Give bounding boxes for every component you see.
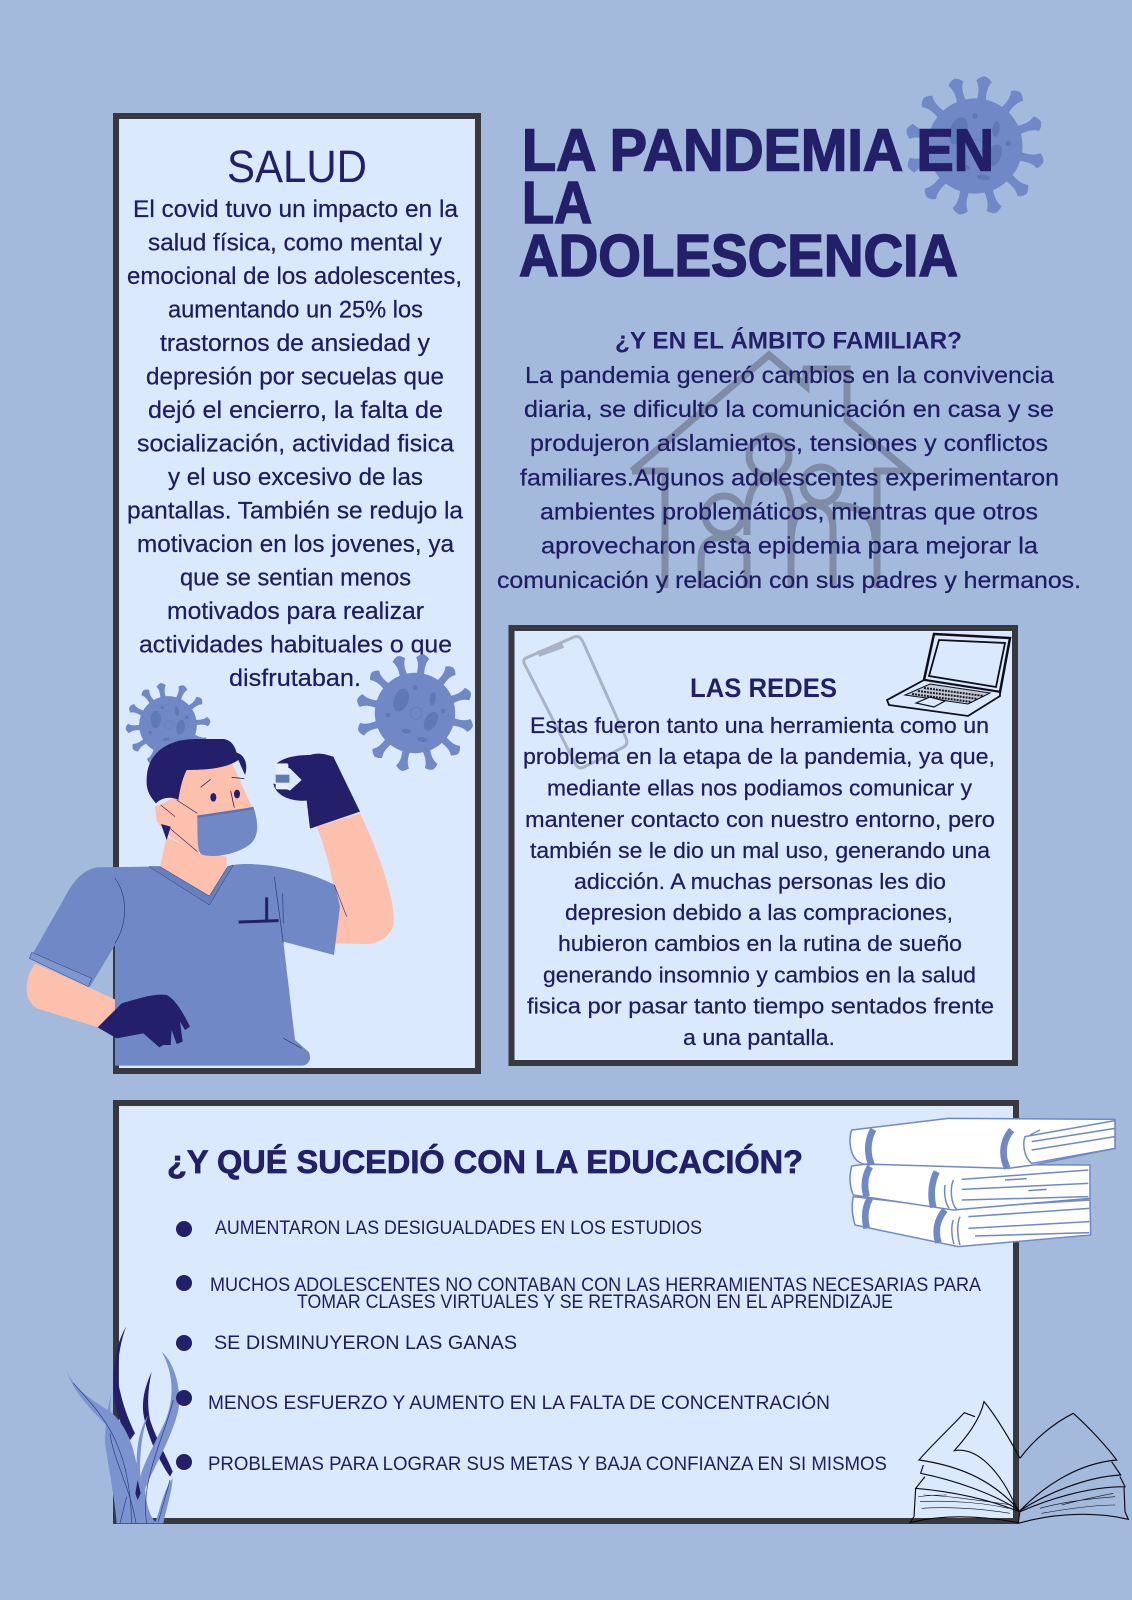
icon: virus large in salud panel [348, 646, 482, 780]
icon: laptop [887, 634, 1010, 716]
mask [197, 807, 257, 856]
icon: virus small in salud panel [118, 676, 218, 775]
text block: las redes: a una pantalla. [683, 1025, 835, 1050]
text block: las redes: mantener contacto con nuestro entorno, pero [525, 807, 995, 832]
icon: open book [910, 1402, 1128, 1523]
text block: las redes: hubieron cambios en la rutina de sueño [558, 931, 962, 956]
text block: salud: salud física, como mental y [148, 230, 442, 256]
text block: las redes: generando insomnio y cambios en la salud [543, 962, 976, 988]
text block: ámbito familiar: aprovecharon esta epidemia para mejorar la [541, 532, 1039, 558]
text block: las redes: adicción. A muchas personas les dio [574, 869, 946, 894]
icon: seaweed plant [67, 1327, 179, 1523]
text block: salud: aumentando un 25% los [168, 296, 423, 324]
text block: salud: trastornos de ansiedad y [160, 330, 430, 357]
top book [850, 1118, 1115, 1168]
text block: salud: El covid tuvo un impacto en la [133, 196, 459, 223]
pocket [239, 897, 279, 922]
title [519, 118, 994, 289]
text block: salud: emocional de los adolescentes, [127, 263, 462, 290]
text block: salud: que se sentian menos [180, 564, 411, 592]
cuff [29, 952, 92, 987]
heading: educación: ¿Y QUÉ SUCEDIÓ CON LA EDUCACIÓN? [167, 1144, 803, 1180]
heading: ámbito familiar: ¿Y EN EL ÁMBITO FAMILIAR? [615, 326, 962, 354]
head [155, 758, 253, 853]
heading: las redes: LAS REDES [690, 673, 837, 703]
text block: ámbito familiar: produjeron aislamientos, tensiones y conflictos [530, 430, 1048, 456]
text block: salud: socialización, actividad fisica [137, 430, 455, 458]
bullet list: educación: MUCHOS ADOLESCENTES NO CONTABAN CON LAS HERRAMIENTAS NECESARIAS PARA [210, 1275, 981, 1296]
heading: salud: SALUD [227, 141, 367, 192]
panel: salud [116, 116, 478, 1071]
panel: educación [116, 1103, 1016, 1521]
text block: las redes: depresion debido a las compraciones, [565, 900, 953, 925]
text block: salud: pantallas. También se redujo la [127, 498, 464, 524]
bottom book [852, 1197, 1091, 1247]
text block: las redes: mediante ellas nos podiamos comunicar y [547, 776, 973, 800]
lower arm [27, 963, 123, 1027]
bullet list: educación: MENOS ESFUERZO Y AUMENTO EN LA FALTA DE CONCENTRACIÓN [208, 1392, 830, 1414]
text block: salud: motivados para realizar [167, 598, 424, 625]
text block: las redes: problema en la etapa de la pandemia, ya que, [523, 744, 995, 769]
illustration: doctor with vial [27, 739, 394, 1066]
text block: las redes [523, 713, 995, 1050]
face [210, 793, 216, 802]
dark blades [113, 1327, 135, 1440]
text block: las redes: Estas fueron tanto una herramienta como un [530, 713, 989, 738]
neck [149, 837, 227, 898]
glove with vial [273, 754, 360, 829]
seams [115, 877, 347, 1048]
middle book [850, 1164, 1090, 1210]
icon: stack of books [850, 1118, 1115, 1247]
text block: ámbito familiar: La pandemia generó cambios en la convivencia [525, 362, 1055, 388]
hair [147, 739, 246, 840]
text block: salud: disfrutaban. [229, 665, 361, 692]
bullet list: educación: AUMENTARON LAS DESIGUALDADES EN LOS ESTUDIOS [215, 1218, 702, 1239]
raised arm [317, 813, 394, 944]
text block: salud: dejó el encierro, la falta de [148, 397, 443, 424]
title: ADOLESCENCIA [519, 223, 958, 289]
text block: salud [127, 196, 464, 692]
title: LA [522, 170, 592, 236]
text block: salud: depresión por secuelas que [146, 364, 444, 390]
text block: salud: motivacion en los jovenes, ya [137, 531, 455, 558]
text block: ámbito familiar: ambientes problemáticos, mientras que otros [540, 498, 1038, 524]
bullet list: educación: SE DISMINUYERON LAS GANAS [214, 1333, 517, 1354]
collar [149, 865, 233, 905]
text block: ámbito familiar: diaria, se dificulto la comunicación en casa y se [524, 396, 1054, 422]
text block: ámbito familiar: comunicación y relación con sus padres y hermanos. [497, 567, 1081, 593]
bullet list: educación: TOMAR CLASES VIRTUALES Y SE RETRASARON EN EL APRENDIZAJE [297, 1292, 893, 1313]
text block: salud: y el uso excesivo de las [168, 464, 423, 491]
vial [276, 763, 288, 789]
text block: las redes: también se le dio un mal uso, generando una [530, 838, 990, 863]
text block: las redes: fisica por pasar tanto tiempo sentados frente [527, 994, 994, 1018]
text block: ámbito familiar: familiares.Algunos adolescentes experimentaron [520, 464, 1059, 490]
scrubs [30, 864, 340, 1066]
icon: phone [524, 637, 627, 768]
text block: salud: actividades habituales o que [139, 632, 452, 658]
bullet list: educación [176, 1218, 981, 1475]
title: LA PANDEMIA EN [522, 118, 994, 184]
lower glove [98, 995, 190, 1047]
text block: ámbito familiar [497, 362, 1081, 593]
panel: las redes [512, 628, 1015, 1063]
bullet list: educación: PROBLEMAS PARA LOGRAR SUS METAS Y BAJA CONFIANZA EN SI MISMOS [208, 1454, 887, 1475]
icon: virus top right [895, 67, 1055, 226]
light blades [67, 1352, 179, 1523]
icon: house with family [632, 355, 908, 588]
